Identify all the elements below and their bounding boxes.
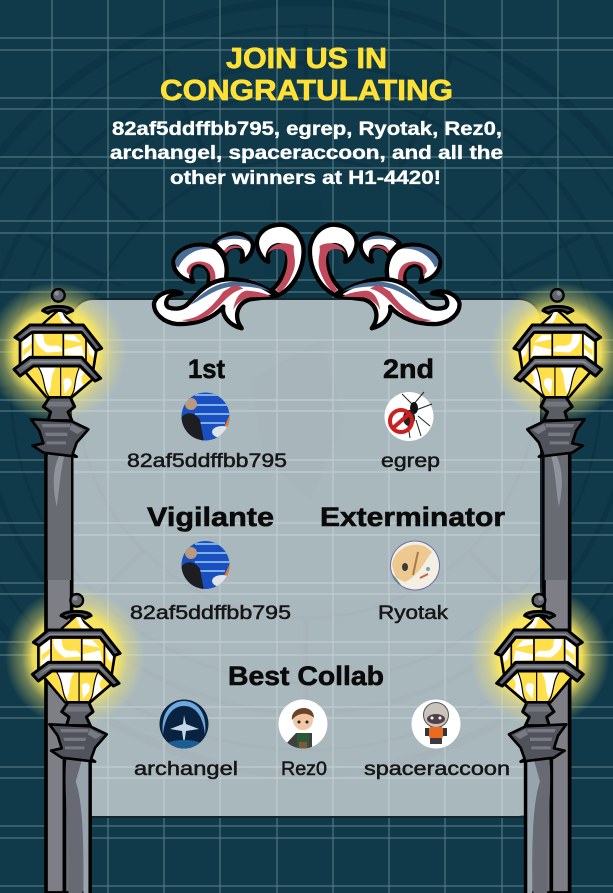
award: 2nd <box>381 354 440 472</box>
avatar: 82af5ddffbb795 <box>182 541 230 589</box>
award: Best Collab: spaceraccoon <box>364 759 510 780</box>
lamp glow: lower left <box>5 587 145 727</box>
ornament: right scroll <box>310 225 460 328</box>
avatar: Rez0 <box>278 700 328 749</box>
award: Vigilante: Vigilante <box>147 502 274 532</box>
award: Exterminator: Exterminator <box>320 502 506 532</box>
subtitle: 82af5ddffbb795, egrep, Ryotak, Rez0, <box>112 118 502 140</box>
lamp glow: top left <box>0 282 126 422</box>
award: 1st: 1st <box>188 354 225 384</box>
avatar: 82af5ddffbb795 <box>182 392 230 440</box>
street lamp: lower left <box>32 594 120 893</box>
avatar: spaceraccoon <box>412 700 460 748</box>
award: Exterminator <box>320 502 506 624</box>
street lamp: lower right <box>496 594 583 893</box>
subtitle <box>110 118 503 189</box>
title: CONGRATULATING <box>160 75 453 107</box>
lamp glow: top right <box>489 282 613 422</box>
avatar: egrep <box>384 392 434 441</box>
subtitle: other winners at H1-4420! <box>170 167 441 189</box>
award: 2nd: egrep <box>381 451 440 472</box>
award: Best Collab: archangel <box>134 759 238 780</box>
award: Vigilante: 82af5ddffbb795 <box>130 603 291 624</box>
avatar: archangel <box>159 699 209 750</box>
award: Vigilante <box>130 502 291 624</box>
award: 2nd: 2nd <box>383 354 434 384</box>
award: 1st <box>127 354 287 472</box>
award: 1st: 82af5ddffbb795 <box>127 451 287 472</box>
street lamp: top left <box>14 289 102 893</box>
award: Best Collab <box>134 661 510 780</box>
street lamp: top right <box>514 289 602 893</box>
winners panel <box>71 299 541 817</box>
avatar: Ryotak <box>390 540 440 591</box>
award: Best Collab: Best Collab <box>228 661 384 691</box>
title <box>160 43 453 107</box>
award: Exterminator: Ryotak <box>378 603 449 624</box>
award: Best Collab: Rez0 <box>281 759 327 780</box>
lamp glow: lower right <box>470 587 610 727</box>
ornament: left scroll <box>154 225 304 328</box>
subtitle: archangel, spaceraccoon, and all the <box>110 142 503 164</box>
title: JOIN US IN <box>226 43 387 75</box>
